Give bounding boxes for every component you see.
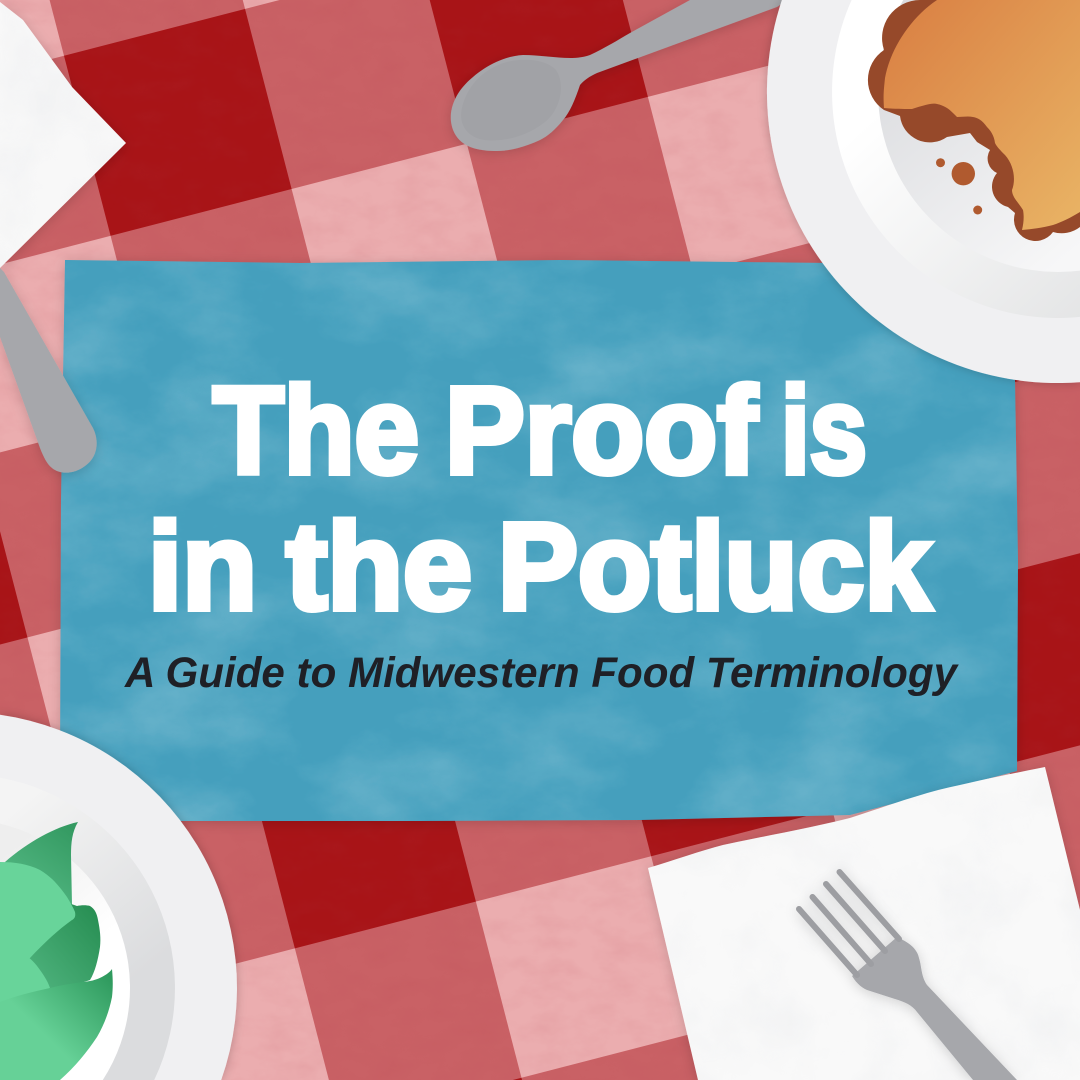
back leaf (5, 822, 78, 930)
napkin: bottom right (648, 767, 1080, 1080)
pie filling (884, 0, 1080, 230)
word: The: The (213, 363, 419, 500)
word: the: the (286, 499, 472, 636)
blue title panel (60, 260, 1018, 821)
plate well (878, 0, 1080, 272)
word: in: in (148, 499, 257, 636)
word: Potluck: Potluck (498, 499, 932, 636)
plate inner ring (832, 0, 1080, 318)
dark leaf (15, 900, 100, 1000)
plate rim (0, 715, 237, 1080)
word: Proof: Proof (445, 363, 758, 500)
plate rim (767, 0, 1080, 383)
plate: top right with pie (767, 0, 1080, 383)
fork (799, 872, 1017, 1080)
plate well (0, 824, 130, 1080)
utensil handle: left (0, 268, 97, 473)
small light leaf (0, 950, 50, 1010)
spoon: top (451, 0, 788, 151)
front leaf (0, 969, 113, 1080)
pie crust (868, 0, 1080, 241)
plate inner ring (0, 778, 175, 1080)
napkin: top left (0, 2, 126, 268)
title (148, 363, 932, 636)
word: is: is (781, 363, 867, 500)
light leaf (0, 862, 75, 975)
crumbs (936, 158, 982, 214)
subtitle: A Guide to Midwestern Food Terminology (124, 649, 959, 697)
plate: bottom left with greens (0, 715, 237, 1080)
